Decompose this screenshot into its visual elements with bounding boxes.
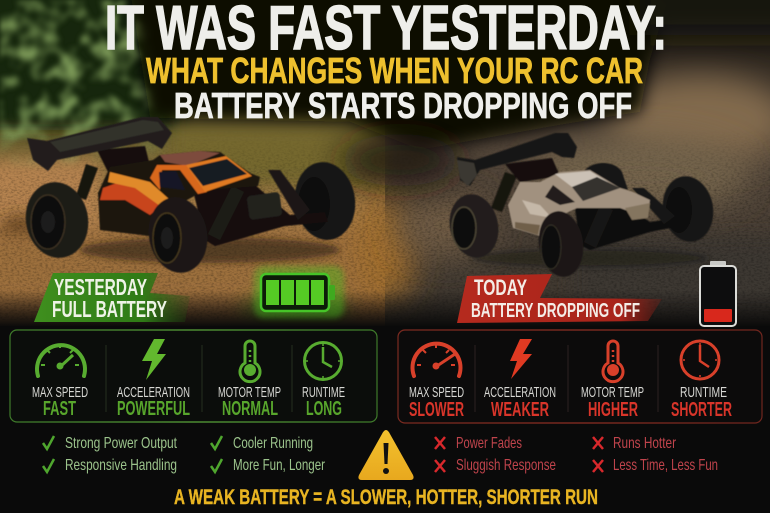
stat: max speed: MAX SPEED <box>32 385 88 401</box>
stat: max speed <box>409 385 464 421</box>
stat: runtime <box>302 385 345 420</box>
bottom takeaway: A WEAK BATTERY = A SLOWER, HOTTER, SHORTER RUN <box>174 486 598 509</box>
stat: motor temp <box>218 385 281 420</box>
benefits list: More Fun, Longer <box>233 457 325 474</box>
stat: max speed <box>32 385 88 420</box>
drawbacks list: Runs Hotter <box>613 435 676 452</box>
stat: acceleration <box>484 385 556 421</box>
stat: runtime <box>671 385 732 421</box>
rear shock and struts <box>76 164 98 200</box>
banner: today battery dropping off: TODAY <box>474 275 527 300</box>
panel: yesterday stats <box>10 330 377 422</box>
stat: runtime: LONG <box>306 398 342 420</box>
far rear wheel <box>583 163 628 190</box>
icon: green thermometer <box>240 341 260 382</box>
stat: acceleration: POWERFUL <box>117 398 190 420</box>
icon: green lightning bolt <box>142 339 166 380</box>
stat: max speed: MAX SPEED <box>409 385 464 401</box>
stat: motor temp: NORMAL <box>222 398 278 420</box>
banner: yesterday full battery: YESTERDAY <box>54 274 147 300</box>
benefits list: Cooler Running <box>233 435 313 452</box>
rear wheel <box>20 177 94 263</box>
rear shock <box>491 172 517 212</box>
stat: acceleration: WEAKER <box>491 399 549 421</box>
stat: motor temp: MOTOR TEMP <box>218 385 281 401</box>
icon: red clock <box>681 341 719 379</box>
stat: acceleration: ACCELERATION <box>484 385 556 401</box>
stat: max speed: SLOWER <box>409 399 464 421</box>
stat: motor temp: MOTOR TEMP <box>581 385 644 401</box>
near front wheel <box>535 208 587 280</box>
icon: red speedometer <box>412 344 460 376</box>
icon: red lightning bolt <box>510 339 532 379</box>
stat: acceleration <box>117 385 190 420</box>
far front wheel <box>658 172 718 246</box>
near front wheel <box>143 193 213 277</box>
far front wheel <box>290 158 360 244</box>
right car: battery dropping off <box>444 133 718 280</box>
icon: green speedometer <box>37 344 85 376</box>
chassis and suspension <box>193 185 328 246</box>
body shell <box>98 151 260 236</box>
photo background <box>0 0 770 324</box>
benefits list <box>43 435 325 474</box>
drawbacks list: Sluggish Response <box>456 457 556 474</box>
body shell <box>508 170 650 236</box>
chassis and suspension <box>575 205 690 250</box>
stat: motor temp <box>581 385 644 421</box>
icon: full green battery <box>254 266 344 318</box>
title: BATTERY STARTS DROPPING OFF <box>174 85 632 126</box>
drawbacks list: Less Time, Less Fun <box>613 457 718 474</box>
icon: red thermometer <box>603 341 623 382</box>
drawbacks list <box>435 435 718 474</box>
rear wheel <box>444 190 504 262</box>
benefits list: Strong Power Output <box>65 435 177 452</box>
rear wing <box>457 133 577 186</box>
banner: today battery dropping off <box>457 274 662 323</box>
stat: runtime: RUNTIME <box>302 385 345 401</box>
banner: yesterday full battery <box>34 273 190 322</box>
rear wing <box>27 117 172 171</box>
drawbacks list: Power Fades <box>456 435 522 452</box>
icon: warning triangle <box>358 430 414 480</box>
banner: today battery dropping off: BATTERY DROPPING OFF <box>471 300 640 322</box>
stat: max speed: FAST <box>43 398 76 420</box>
stat: runtime: RUNTIME <box>680 385 727 401</box>
stat: runtime: SHORTER <box>671 399 732 421</box>
banner: yesterday full battery: FULL BATTERY <box>52 296 167 322</box>
benefits list: Responsive Handling <box>65 457 177 474</box>
panel: today stats <box>398 330 762 423</box>
icon: green clock <box>304 342 342 380</box>
title <box>105 0 667 126</box>
stat: acceleration: ACCELERATION <box>117 385 190 401</box>
left car: full battery <box>20 117 360 277</box>
icon: low red battery <box>700 261 736 326</box>
stat: motor temp: HIGHER <box>588 399 638 421</box>
